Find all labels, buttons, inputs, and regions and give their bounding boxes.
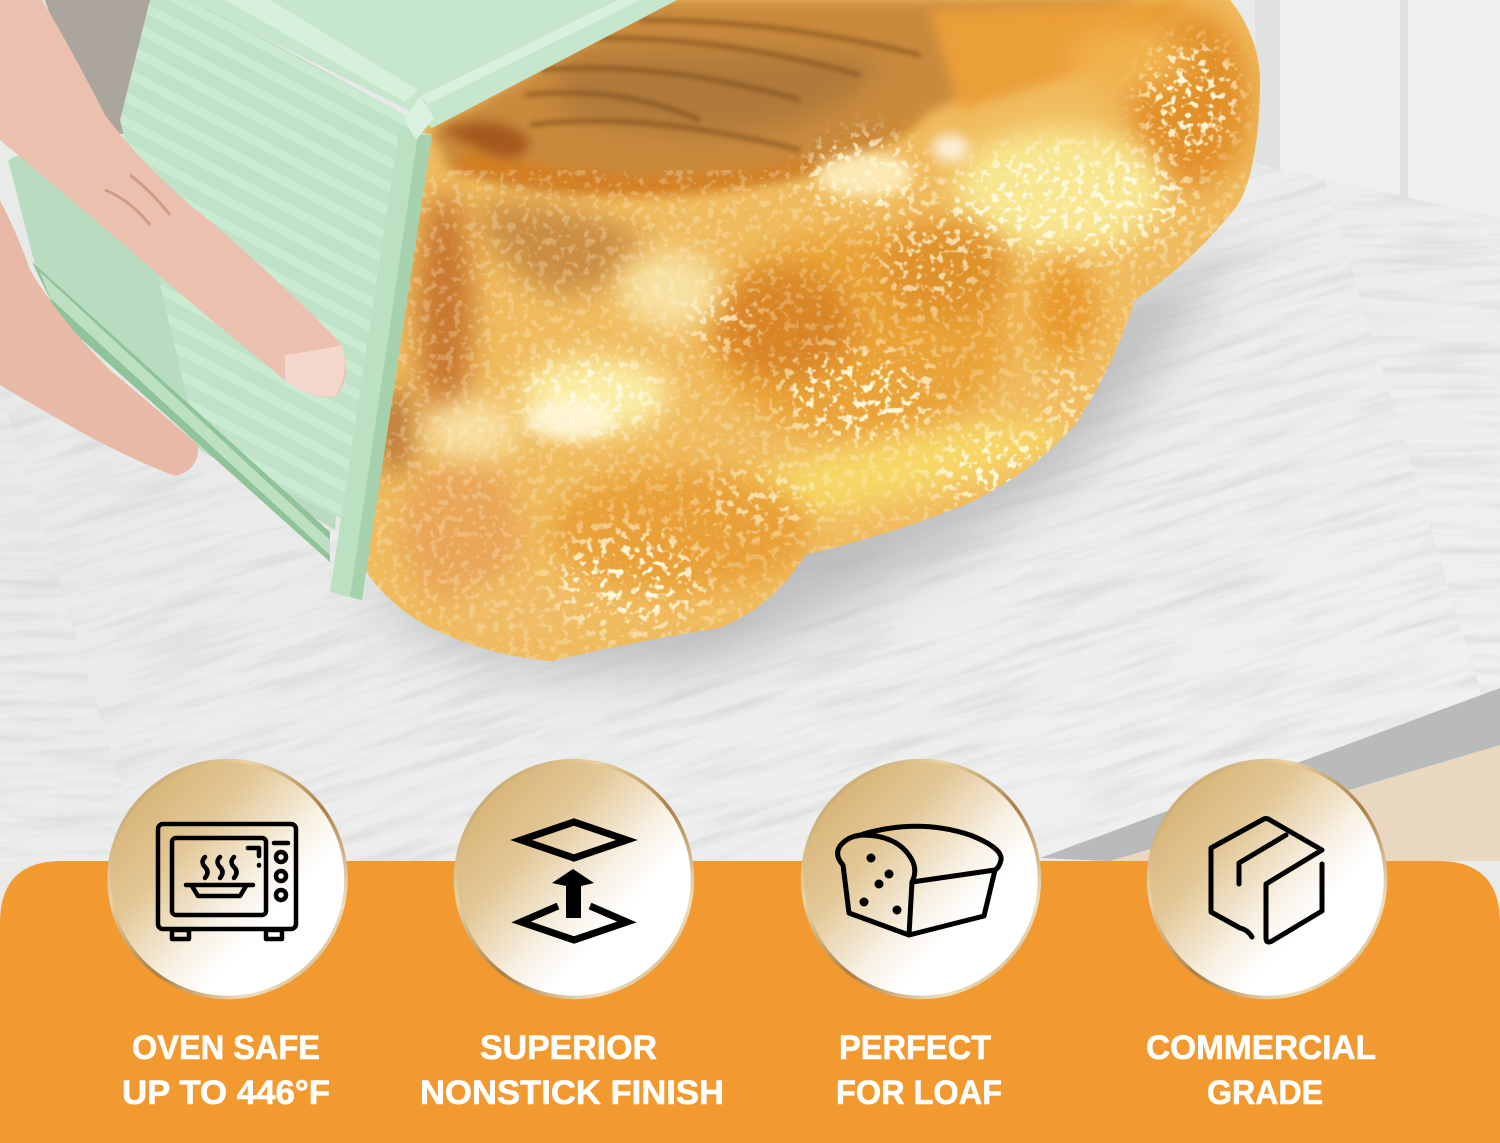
- label: OVEN SAFE: [132, 1029, 320, 1067]
- pan inner lid panel: [8, 150, 345, 530]
- badge disc: [109, 760, 346, 998]
- feature: nonstick finish: [420, 760, 724, 1112]
- loaf crumb speckle: [350, 0, 1280, 670]
- loaf shadow on counter: [360, 240, 1230, 671]
- pan top face: [190, 0, 677, 128]
- wooden cabinet lower right: [1090, 720, 1500, 861]
- label: PERFECT: [839, 1029, 991, 1067]
- pan ribbed side: [120, 0, 410, 520]
- icon: layer lifting off: [521, 822, 627, 940]
- hand holding the pan: [0, 0, 346, 476]
- label: COMMERCIAL: [1146, 1029, 1376, 1067]
- bread loaf: [350, 0, 1280, 670]
- feature: perfect for loaf: [802, 760, 1040, 1112]
- badge disc: [456, 760, 692, 998]
- icon: oven: [158, 824, 296, 939]
- green loaf pan: [8, 0, 677, 600]
- shelf background behind hand: [45, 0, 170, 140]
- loaf top crust: [430, 0, 1140, 190]
- feature: commercial grade: [1146, 760, 1386, 1112]
- loaf golden blotches: [1128, 10, 1252, 190]
- pan bottom rail: [32, 262, 330, 562]
- counter front edge: [1040, 688, 1500, 861]
- badge disc: [1148, 760, 1386, 998]
- loaf left face: [475, 202, 650, 295]
- icon: package box: [1211, 818, 1322, 942]
- feature: nonstick finish: NONSTICK FINISH: [420, 1074, 724, 1112]
- icon: bread loaf: [838, 826, 1001, 935]
- feature: oven safe: [109, 760, 346, 1112]
- pan front corner edge: [330, 125, 432, 600]
- badge disc: [802, 760, 1040, 998]
- feature: oven safe: UP TO 446°F: [122, 1074, 330, 1112]
- label: SUPERIOR: [480, 1029, 657, 1067]
- feature: perfect for loaf: FOR LOAF: [836, 1074, 1002, 1112]
- orange footer band: [0, 861, 1500, 1143]
- feature: commercial grade: GRADE: [1207, 1074, 1323, 1112]
- white textured countertop: [0, 164, 1500, 861]
